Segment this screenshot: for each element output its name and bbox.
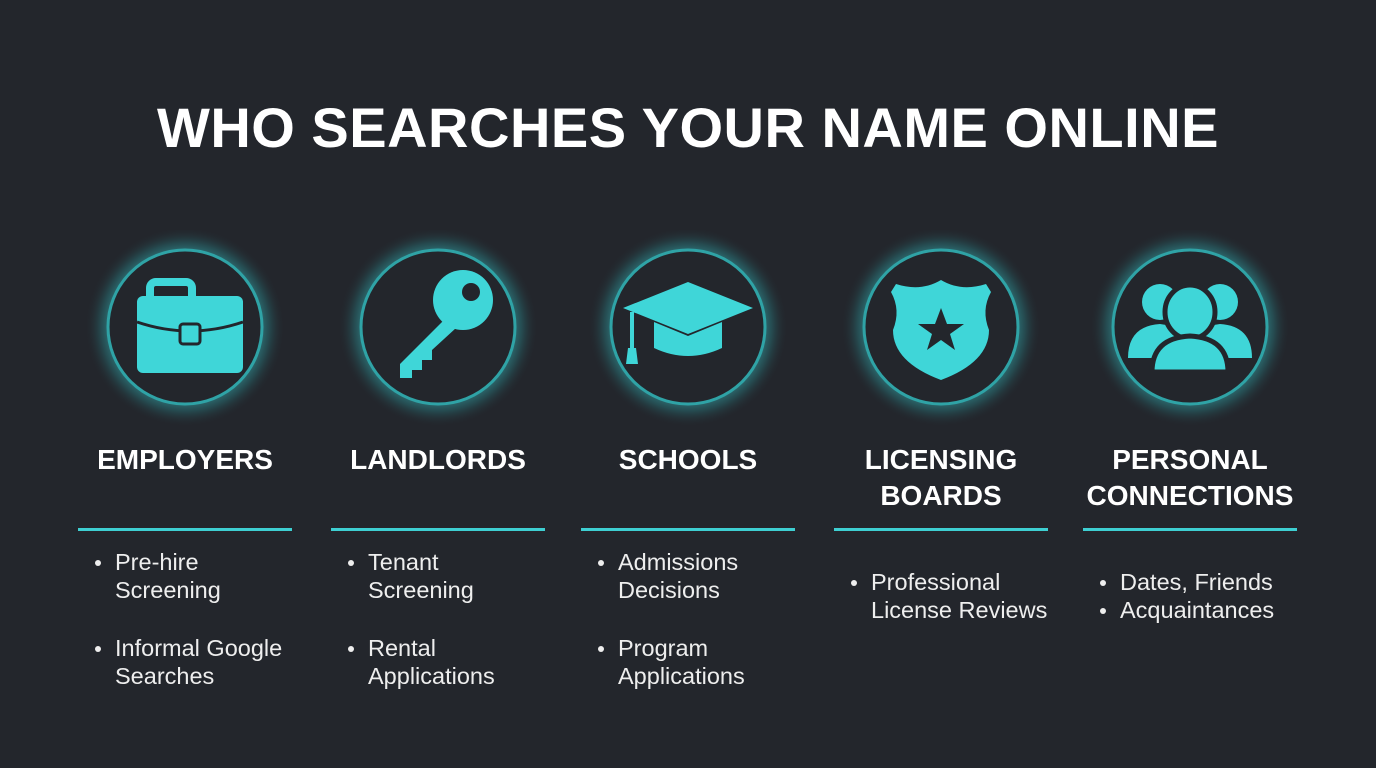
icon: key [346,234,530,420]
bullets: Dates, Friends [1120,569,1273,595]
bullets [598,549,745,689]
bullets [851,569,1047,623]
heading: SCHOOLS [619,444,757,475]
title: WHO SEARCHES YOUR NAME ONLINE [157,96,1219,159]
icon: briefcase [92,234,278,420]
column: personal connections [1083,234,1297,623]
bullets: Acquaintances [1120,597,1274,623]
bullets: Searches [115,663,214,689]
bullets: Screening [368,577,474,603]
bullets: Tenant [368,549,439,575]
heading: LANDLORDS [350,444,526,475]
heading: EMPLOYERS [97,444,273,475]
bullets: Screening [115,577,221,603]
bullets: Applications [368,663,495,689]
bullets: Applications [618,663,745,689]
column: employers [78,234,292,689]
icon: graduation cap [596,234,780,420]
icon: people [1098,234,1282,420]
icon: badge [848,234,1034,420]
heading [1087,444,1293,511]
heading: LICENSING [865,444,1017,475]
column: schools [581,234,795,689]
bullets: Professional [871,569,1000,595]
bullets: License Reviews [871,597,1047,623]
bullets: Pre-hire [115,549,199,575]
heading [865,444,1017,511]
column: landlords [331,234,545,689]
bullets: Decisions [618,577,720,603]
heading: CONNECTIONS [1087,480,1293,511]
bullets [348,549,495,689]
bullets: Program [618,635,708,661]
bullets [1100,569,1274,623]
bullets [95,549,282,689]
bullets: Informal Google [115,635,282,661]
bullets: Admissions [618,549,738,575]
bullets: Rental [368,635,436,661]
column: licensing boards [834,234,1048,623]
heading: PERSONAL [1112,444,1268,475]
heading: BOARDS [880,480,1002,511]
